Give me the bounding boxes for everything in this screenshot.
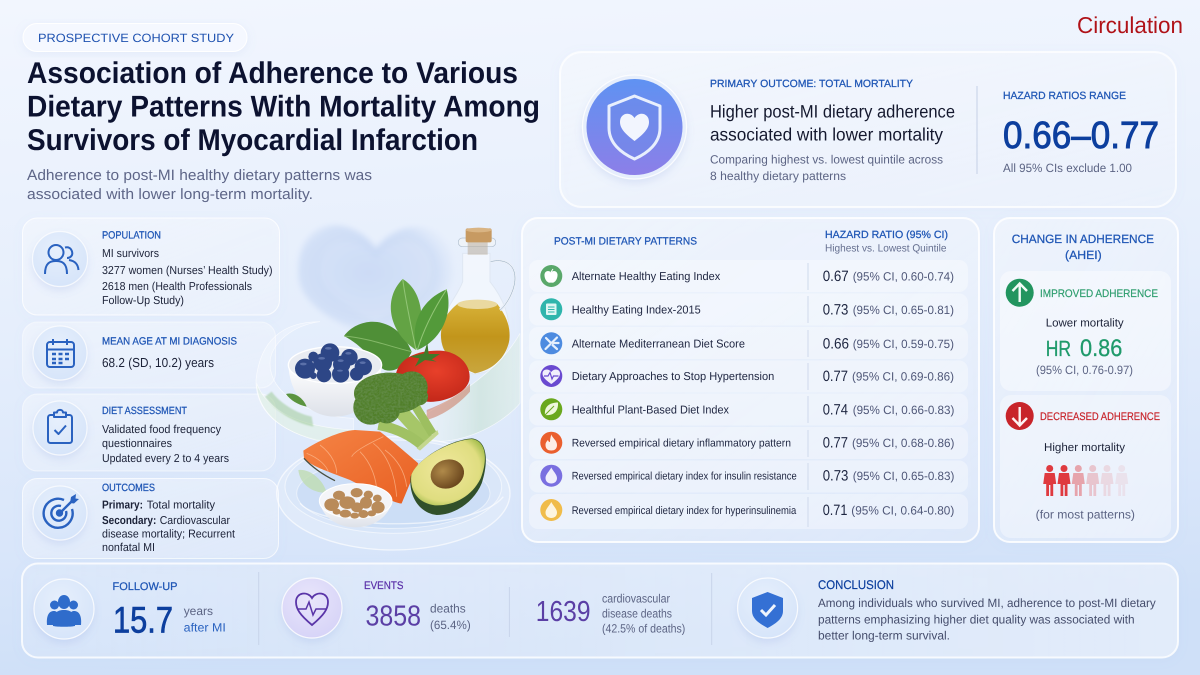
primary outcome text: Comparing highest vs. lowest quintile across <box>710 152 943 166</box>
row: AHEI: Alternate Healthy Eating Index <box>572 271 721 283</box>
outcomes text: disease mortality; Recurrent <box>102 529 236 541</box>
hazard ratio range: 0.66–0.77 <box>1003 115 1159 157</box>
row: hPDI <box>529 394 968 426</box>
card: improved adherence: HR <box>1046 336 1071 361</box>
events: 3858 <box>366 601 421 633</box>
outcomes text: Total mortality <box>147 500 215 512</box>
conclusion: better long-term survival. <box>818 629 950 643</box>
title <box>27 57 540 157</box>
icon: amber drop <box>540 499 562 521</box>
conclusion: patterns emphasizing higher diet quality was associated with <box>818 612 1135 626</box>
hazard ratio range <box>1003 90 1159 175</box>
icon: sprig <box>540 332 562 354</box>
follow-up: FOLLOW-UP <box>112 581 178 593</box>
card: decreased adherence: DECREASED ADHERENCE <box>1040 411 1160 423</box>
subtitle: Adherence to post-MI healthy dietary patterns was <box>27 167 372 184</box>
icon: down arrow <box>1006 402 1034 430</box>
follow-up: 15.7 <box>113 599 173 640</box>
title: Dietary Patterns With Mortality Among <box>27 90 540 124</box>
row: DASH: (95% CI, 0.69-0.86) <box>852 370 954 384</box>
row: EDIH: Reversed empirical dietary index for hyperinsulinemia <box>572 505 797 517</box>
card: improved adherence <box>1000 271 1171 391</box>
conclusion <box>738 578 1156 643</box>
row: HEI-2015: Healthy Eating Index-2015 <box>572 304 701 316</box>
events: (65.4%) <box>430 618 471 632</box>
follow-up: years <box>184 604 213 618</box>
card: improved adherence: 0.86 <box>1080 335 1122 362</box>
population text: 3277 women (Nurses’ Health Study) <box>102 265 273 277</box>
row: EDIP <box>529 427 968 459</box>
conclusion: CONCLUSION <box>818 578 894 592</box>
mean age text <box>102 336 237 370</box>
panel: primary outcome <box>560 52 1176 207</box>
cardiovascular deaths: cardiovascular <box>602 592 670 606</box>
blueberry bowl <box>288 343 382 417</box>
icon: heart with pulse <box>282 578 342 638</box>
cardiovascular deaths <box>536 592 685 636</box>
hazard ratio range: HAZARD RATIOS RANGE <box>1003 90 1126 102</box>
panel heading <box>1012 232 1154 262</box>
row: EDIH: 0.71 <box>823 502 847 519</box>
basil leaves <box>344 279 449 371</box>
diet assessment text: Updated every 2 to 4 years <box>102 453 229 465</box>
row: HEI-2015: (95% CI, 0.65-0.81) <box>853 303 954 317</box>
lower glass plate <box>277 437 510 550</box>
panel: outcomes <box>22 478 278 558</box>
primary outcome text: Higher post-MI dietary adherence <box>710 102 955 122</box>
population text <box>102 230 273 307</box>
icon: apple <box>540 265 562 287</box>
card: decreased adherence <box>1000 395 1171 538</box>
events <box>282 578 471 638</box>
outcomes text: OUTCOMES <box>102 482 155 494</box>
subtitle <box>27 167 372 203</box>
icon: document <box>540 298 562 320</box>
icon: shield with heart <box>582 75 686 179</box>
row: hPDI: Healthful Plant-Based Diet Index <box>572 404 729 416</box>
row: AHEI <box>529 260 968 292</box>
panel: dietary patterns table <box>522 218 979 542</box>
table header: Highest vs. Lowest Quintile <box>825 242 947 254</box>
row: hPDI: (95% CI, 0.66-0.83) <box>853 403 954 417</box>
card: decreased adherence: (for most patterns) <box>1036 507 1135 521</box>
panel heading: (AHEI) <box>1065 248 1102 262</box>
diet assessment text: Validated food frequency <box>102 424 221 436</box>
row: HEI-2015 <box>529 294 968 326</box>
primary outcome text <box>710 78 955 183</box>
panel: mean age <box>22 322 276 388</box>
card: improved adherence: (95% CI, 0.76-0.97) <box>1036 363 1133 377</box>
icon: flame <box>540 432 562 454</box>
diet assessment text: DIET ASSESSMENT <box>102 405 187 417</box>
icon: calendar <box>33 326 87 380</box>
title: Association of Adherence to Various <box>27 57 518 90</box>
icon: shield check <box>738 578 798 638</box>
row: hPDI: 0.74 <box>823 401 848 418</box>
population text: 2618 men (Health Professionals <box>102 281 252 293</box>
primary outcome text: PRIMARY OUTCOME: TOTAL MORTALITY <box>710 78 913 90</box>
cardiovascular deaths: disease deaths <box>602 607 672 621</box>
food illustration <box>256 225 520 550</box>
row: EDIP: Reversed empirical dietary inflammatory pattern <box>572 438 791 450</box>
outcomes text: nonfatal MI <box>102 542 155 554</box>
icon: leaf <box>540 398 562 420</box>
table header: HAZARD RATIO (95% CI) <box>825 229 948 241</box>
avocado <box>410 438 486 515</box>
primary outcome text: associated with lower mortality <box>710 124 943 144</box>
population text: MI survivors <box>102 248 159 260</box>
tomato <box>396 343 470 402</box>
population text: Follow-Up Study) <box>102 295 184 307</box>
row: DASH <box>529 360 968 392</box>
study type pill: PROSPECTIVE COHORT STUDY <box>38 31 234 45</box>
panel heading: CHANGE IN ADHERENCE <box>1012 232 1154 246</box>
row: aMED <box>529 327 968 359</box>
row: aMED: Alternate Mediterranean Diet Score <box>572 338 745 350</box>
row: EDIR <box>529 460 968 492</box>
journal name: Circulation <box>1077 12 1183 38</box>
icon: clipboard <box>33 401 87 455</box>
olive oil bottle <box>441 228 515 374</box>
panel: population <box>22 218 280 315</box>
follow-up <box>34 579 226 640</box>
hazard ratio range: All 95% CIs exclude 1.00 <box>1003 161 1132 175</box>
row: DASH: 0.77 <box>823 368 848 385</box>
left glass swoosh <box>257 383 353 445</box>
row: EDIR: Reversed empirical dietary index for insulin resistance <box>572 471 797 483</box>
diet assessment text: questionnaires <box>102 438 172 450</box>
panel: change in adherence <box>994 218 1178 542</box>
icon: glass heart <box>298 225 454 338</box>
outcomes text: Primary: <box>102 500 143 512</box>
row: AHEI: (95% CI, 0.60-0.74) <box>853 270 954 284</box>
outcomes text <box>102 482 236 554</box>
row: EDIP: 0.77 <box>823 435 848 452</box>
follow-up: after MI <box>184 620 226 634</box>
events: EVENTS <box>364 580 403 592</box>
card: improved adherence: Lower mortality <box>1046 317 1124 329</box>
icon: six people, fading <box>1043 465 1128 496</box>
row: DASH: Dietary Approaches to Stop Hypertension <box>572 371 774 383</box>
broccoli <box>353 371 439 451</box>
population text: POPULATION <box>102 230 161 242</box>
title: Survivors of Myocardial Infarction <box>27 124 478 157</box>
basil sprig under salmon <box>298 470 327 493</box>
mean age text: 68.2 (SD, 10.2) years <box>102 355 214 370</box>
row: EDIP: (95% CI, 0.68-0.86) <box>852 436 954 450</box>
upper glass bowl back <box>256 322 353 443</box>
row: aMED: (95% CI, 0.59-0.75) <box>853 337 954 351</box>
row: EDIH: (95% CI, 0.64-0.80) <box>851 504 954 518</box>
cardiovascular deaths: (42.5% of deaths) <box>602 622 685 636</box>
card: improved adherence: IMPROVED ADHERENCE <box>1040 288 1158 300</box>
row: aMED: 0.66 <box>823 335 849 352</box>
icon: people <box>32 232 88 286</box>
panel: bottom summary bar <box>22 564 1178 658</box>
row: EDIR: 0.73 <box>823 468 848 485</box>
icon: target <box>33 486 87 540</box>
right glass swoosh <box>420 333 520 441</box>
subtitle: associated with lower long-term mortality. <box>27 186 313 203</box>
row: EDIR: (95% CI, 0.65-0.83) <box>853 469 954 483</box>
table header: POST-MI DIETARY PATTERNS <box>554 236 697 248</box>
nut bowl <box>319 484 392 527</box>
primary outcome text: 8 healthy dietary patterns <box>710 169 846 183</box>
icon: heart pulse <box>540 365 562 387</box>
icon: violet drop <box>540 465 562 487</box>
outcomes text: Secondary: <box>102 515 156 527</box>
row: HEI-2015: 0.73 <box>823 301 848 318</box>
events: deaths <box>430 601 466 615</box>
icon: group of people <box>34 579 94 639</box>
study type pill <box>23 24 247 52</box>
table header <box>554 229 948 254</box>
row: AHEI: 0.67 <box>823 268 849 285</box>
salmon <box>303 430 418 503</box>
cardiovascular deaths: 1639 <box>536 596 590 628</box>
panel: diet assessment <box>22 394 276 471</box>
conclusion: Among individuals who survived MI, adherence to post-MI dietary <box>818 596 1156 610</box>
icon: up arrow <box>1006 279 1034 307</box>
mean age text: MEAN AGE AT MI DIAGNOSIS <box>102 336 237 348</box>
outcomes text: Cardiovascular <box>160 515 230 527</box>
diet assessment text <box>102 405 229 465</box>
card: decreased adherence: Higher mortality <box>1044 442 1125 454</box>
row: EDIH <box>529 494 968 529</box>
